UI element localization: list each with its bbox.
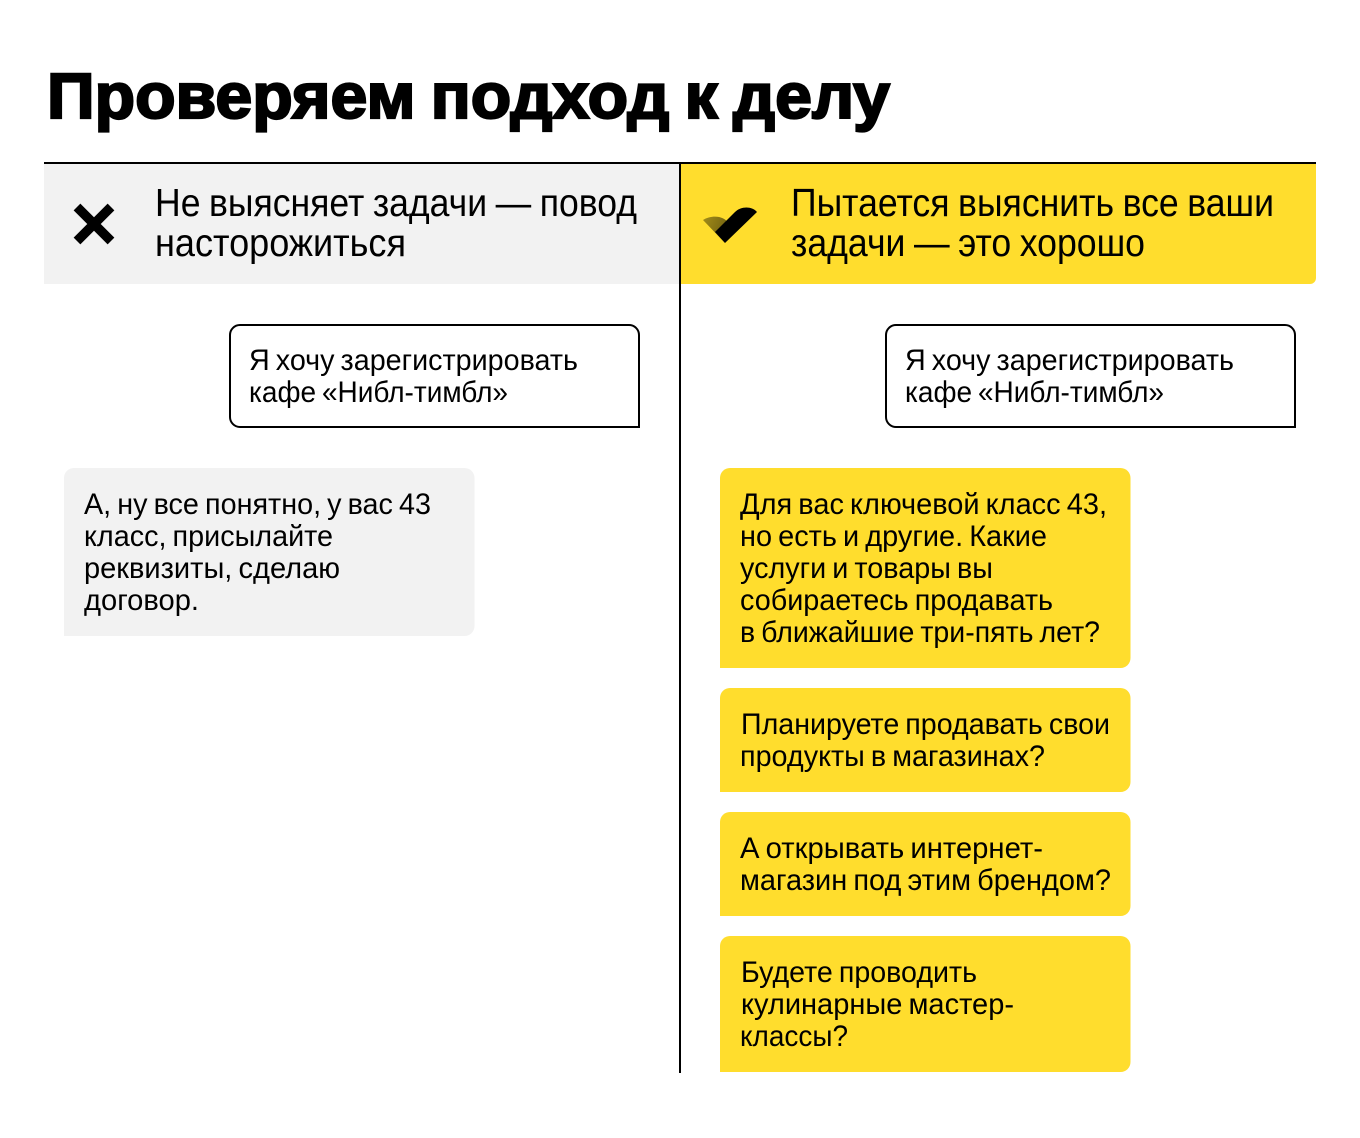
panel: good approach xyxy=(681,164,1316,1072)
grey reply bubble: договор. xyxy=(84,584,199,617)
client message: left: Я хочу зарегистрировать xyxy=(249,344,578,377)
header text: good approach: задачи — это хорошо xyxy=(791,222,1145,265)
header text: good approach xyxy=(791,182,1274,265)
client message: left: кафе «Нибл-тимбл» xyxy=(249,376,508,409)
header text: bad approach: Не выясняет задачи — повод xyxy=(155,182,637,225)
yellow bubble: master classes question: классы? xyxy=(740,1020,848,1053)
panel: bad approach xyxy=(44,164,680,636)
grey reply bubble: А, ну все понятно, у вас 43 xyxy=(84,488,431,521)
client message: left xyxy=(230,325,639,427)
header: bad approach xyxy=(44,164,680,284)
yellow bubble: stores question xyxy=(720,688,1130,792)
title: Проверяем подход к делу xyxy=(47,60,890,132)
yellow bubble: stores question: продукты в магазинах? xyxy=(740,740,1045,773)
client message: right: кафе «Нибл-тимбл» xyxy=(905,376,1164,409)
yellow bubble: stores question: Планируете продавать свои xyxy=(741,708,1110,741)
grey reply bubble xyxy=(64,468,474,636)
icon: check mark xyxy=(703,208,757,243)
yellow bubble: master classes question: кулинарные мастер- xyxy=(741,988,1014,1021)
yellow bubble: key class question: но есть и другие. Какие xyxy=(740,520,1047,553)
icon: cross xyxy=(77,207,111,241)
yellow bubble: key class question: услуги и товары вы xyxy=(740,552,993,585)
header: good approach xyxy=(681,164,1316,284)
yellow bubble: key class question xyxy=(720,468,1130,668)
yellow bubble: online store question: А открывать интернет- xyxy=(740,832,1043,865)
header text: bad approach: насторожиться xyxy=(155,222,406,265)
grey reply bubble: класс, присылайте xyxy=(84,520,333,553)
yellow bubble: master classes question: Будете проводить xyxy=(741,956,977,989)
yellow bubble: key class question: Для вас ключевой класс 43, xyxy=(740,488,1107,521)
yellow bubble: online store question: магазин под этим брендом? xyxy=(740,864,1111,897)
yellow bubble: master classes question xyxy=(720,936,1130,1072)
yellow bubble: key class question: в ближайшие три-пять лет? xyxy=(740,616,1100,649)
yellow bubble: key class question: собираетесь продавать xyxy=(740,584,1053,617)
header text: good approach: Пытается выяснить все ваши xyxy=(791,182,1274,225)
client message: right xyxy=(886,325,1295,427)
grey reply bubble: реквизиты, сделаю xyxy=(84,552,340,585)
yellow bubble: online store question xyxy=(720,812,1130,916)
header text: bad approach xyxy=(155,182,637,265)
client message: right: Я хочу зарегистрировать xyxy=(905,344,1234,377)
